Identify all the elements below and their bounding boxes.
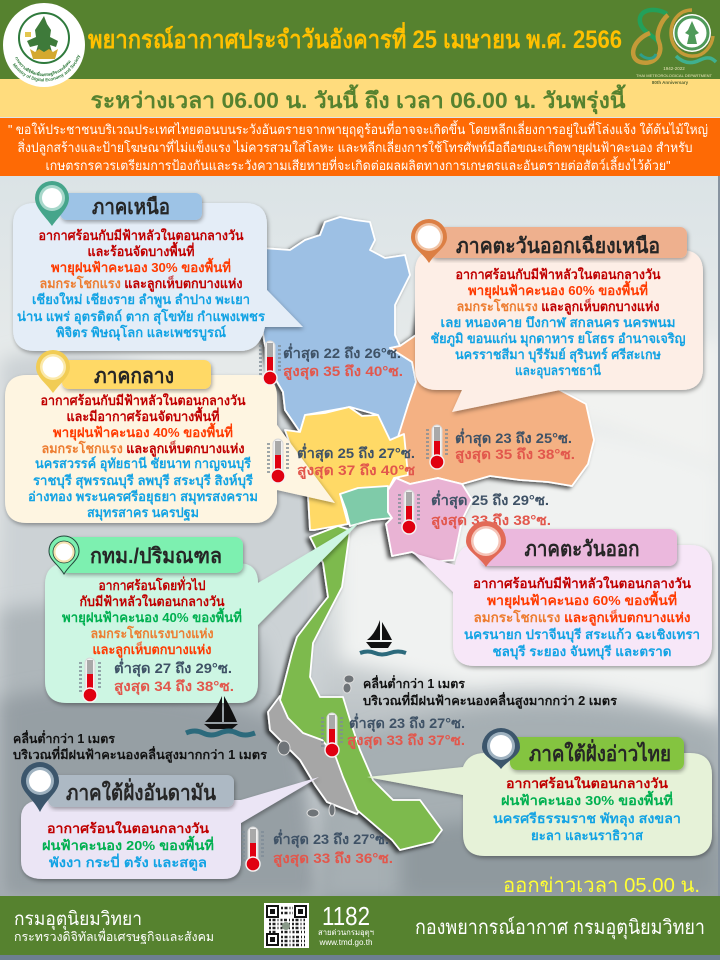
panel: central — [5, 350, 335, 523]
text east: ลมกระโชกแรง และลูกเห็บตกบางแห่ง — [474, 608, 690, 626]
text Bangkok: อากาศร้อนโดยทั่วไป — [98, 576, 206, 593]
wave note east — [363, 675, 617, 709]
icon: location pin central — [36, 350, 70, 393]
text northeast — [430, 266, 686, 379]
text north: อากาศร้อนกับมีฟ้าหลัวในตอนกลางวัน — [38, 227, 244, 243]
icon: location pin south gulf — [482, 728, 520, 769]
text east: อากาศร้อนกับมีฟ้าหลัวในตอนกลางวัน — [473, 575, 691, 591]
region: central — [285, 407, 408, 530]
temperature central: สูงสุด 37 ถึง 40°ซ — [297, 462, 416, 479]
heading Andaman — [48, 775, 234, 807]
icon: thermometer northeast — [426, 425, 448, 469]
icon: location pin east — [466, 521, 506, 567]
hotline: สายด่วนกรมอุตุฯ — [318, 928, 374, 937]
logo: ministry seal: Ministry of Digital Economy and Society — [12, 54, 80, 82]
anniversary caption: 80th Anniversary — [652, 80, 689, 85]
text east: ชลบุรี ระยอง จันทบุรี และตราด — [492, 644, 672, 660]
footer department name — [14, 909, 214, 944]
callout body south gulf — [367, 753, 712, 856]
heading east: ภาคตะวันออก — [524, 538, 640, 561]
text northeast: ลมกระโชกแรง และลูกเห็บตกบางแห่ง — [456, 297, 660, 315]
panel: south gulf coast — [367, 728, 712, 856]
callout body east — [413, 545, 712, 666]
temperature north: สูงสุด 35 ถึง 40°ซ. — [283, 363, 403, 380]
wave note west: บริเวณที่มีฝนฟ้าคะนองคลื่นสูงมากกว่า 1 เมตร — [13, 746, 267, 763]
text Andaman: อากาศร้อนในตอนกลางวัน — [47, 820, 209, 836]
icon: thermometer Andaman — [242, 827, 264, 871]
heading south gulf — [510, 737, 684, 770]
temperature north: ต่ำสุด 22 ถึง 26°ซ. — [283, 343, 401, 362]
temperature south — [347, 713, 465, 749]
map of Thailand — [258, 217, 594, 850]
text Bangkok: กับมีฟ้าหลัวในตอนกลางวัน — [80, 593, 225, 609]
region: north — [258, 217, 416, 441]
icon: location pin Andaman — [21, 762, 59, 812]
text northeast: อากาศร้อนกับมีฟ้าหลัวในตอนกลางวัน — [456, 266, 661, 282]
heading Andaman: ภาคใต้ฝั่งอันดามัน — [66, 777, 217, 805]
temperature central — [297, 443, 416, 479]
text Bangkok: และลูกเห็บตกบางแห่ง — [92, 640, 212, 658]
text north: น่าน แพร่ อุตรดิตถ์ ตาก สุโขทัย กำแพงเพชร — [17, 308, 265, 325]
text central: อ่างทอง พระนครศรีอยุธยา สมุทรสงคราม — [28, 489, 258, 505]
icon: thermometer south — [321, 713, 343, 757]
wave note east: คลื่นต่ำกว่า 1 เมตร — [363, 675, 465, 691]
warning band: เกษตรกรควรเตรียมการป้องกันและระวังความเสียหายที่จะเกิดต่อผลผลิตทางการเกษตรและอันตรายต่อสัตว์เลี้ยงไว้ด้วย" — [46, 156, 671, 173]
text east: นครนายก ปราจีนบุรี สระแก้ว ฉะเชิงเทรา — [464, 627, 700, 643]
text Andaman: ฝนฟ้าคะนอง 20% ของพื้นที่ — [42, 835, 214, 853]
logo: 80th anniversary: THAI METEOROLOGICAL DEPARTMENT — [636, 73, 713, 78]
temperature south: สูงสุด 33 ถึง 37°ซ. — [347, 732, 465, 749]
text south gulf: ฝนฟ้าคะนอง 30% ของพื้นที่ — [501, 790, 673, 808]
text central: พายุฝนฟ้าคะนอง 40% ของพื้นที่ — [53, 422, 233, 441]
text northeast: นครราชสีมา บุรีรัมย์ สุรินทร์ ศรีสะเกษ — [455, 347, 661, 363]
panel: northeast — [411, 219, 703, 412]
text central: ราชบุรี สุพรรณบุรี ลพบุรี สระบุรี สิงห์บุรี — [33, 473, 253, 489]
text Andaman: พังงา กระบี่ ตรัง และสตูล — [49, 853, 207, 871]
text central: สมุทรสาคร นครปฐม — [87, 505, 199, 522]
panel: south Andaman coast — [21, 762, 319, 879]
header band — [0, 0, 720, 79]
heading north — [60, 193, 202, 220]
text east: พายุฝนฟ้าคะนอง 60% ของพื้นที่ — [487, 590, 677, 609]
title: พยากรณ์อากาศประจำวันอังคารที่ 25 เมษายน พ.ศ. 2566 — [88, 22, 622, 54]
icon: thermometer Bangkok — [79, 658, 101, 702]
heading central: ภาคกลาง — [94, 365, 174, 388]
hotline: 1182 — [322, 901, 370, 931]
text south gulf: อากาศร้อนในตอนกลางวัน — [506, 775, 668, 791]
QR code — [264, 903, 309, 948]
callout body north — [13, 203, 303, 351]
panel: Bangkok and vicinity — [45, 522, 360, 703]
text central: และมีอากาศร้อนจัดบางพื้นที่ — [66, 406, 220, 424]
temperature east: ต่ำสุด 25 ถึง 29°ซ. — [431, 490, 549, 509]
temperature Bangkok: ต่ำสุด 27 ถึง 29°ซ. — [114, 658, 232, 677]
heading Bangkok: กทม./ปริมณฑล — [90, 545, 222, 568]
text north: ลมกระโชกแรง และลูกเห็บตกบางแห่ง — [40, 274, 242, 292]
heading east — [480, 529, 677, 566]
text northeast: และอุบลราชธานี — [515, 363, 601, 379]
icon: thermometer north — [259, 341, 281, 385]
icon: location pin northeast — [411, 219, 447, 263]
temperature Andaman: สูงสุด 33 ถึง 36°ซ. — [273, 850, 393, 867]
heading central — [62, 360, 211, 389]
logo: 80th anniversary — [633, 10, 716, 78]
small islands — [278, 675, 354, 817]
temperature Bangkok — [114, 658, 234, 695]
callout body northeast — [415, 250, 703, 412]
text northeast: พายุฝนฟ้าคะนอง 60% ของพื้นที่ — [468, 280, 648, 299]
text Bangkok: ลมกระโชกแรงบางแห่ง — [90, 625, 214, 641]
issue time: ออกข่าวเวลา 05.00 น. — [503, 875, 700, 897]
text central — [28, 392, 258, 522]
icon: thermometer east — [398, 490, 420, 534]
text north — [17, 227, 265, 341]
temperature northeast: สูงสุด 35 ถึง 38°ซ. — [455, 446, 575, 463]
hotline — [318, 901, 374, 947]
temperature central: ต่ำสุด 25 ถึง 27°ซ. — [297, 443, 415, 462]
text east — [464, 575, 700, 660]
text central: ลมกระโชกแรง และลูกเห็บตกบางแห่ง — [42, 439, 244, 457]
warning band: สิ่งปลูกสร้างและป้ายโฆษณาที่ไม่แข็งแรง ไม่ควรสวมใส่โลหะ และหลีกเลี่ยงการใช้โทรศัพท์มือถือขณะเกิดพายุฝนฟ้าคะนอง สำหรับ — [17, 138, 693, 156]
icon: ship west — [186, 696, 255, 735]
wave note west — [13, 730, 267, 763]
logo: 80th anniversary: 1942-2022 — [663, 66, 685, 71]
temperature northeast — [455, 428, 575, 463]
icon: location pin north — [35, 181, 69, 226]
text Bangkok: พายุฝนฟ้าคะนอง 40% ของพื้นที่ — [62, 607, 242, 626]
text north: พายุฝนฟ้าคะนอง 30% ของพื้นที่ — [51, 257, 231, 276]
subtitle band: ระหว่างเวลา 06.00 น. วันนี้ ถึง เวลา 06.00 น. วันพรุ่งนี้ — [90, 84, 627, 115]
temperature Bangkok: สูงสุด 34 ถึง 38°ซ. — [114, 678, 234, 695]
logo: ministry seal: กระทรวงดิจิทัลเพื่อเศรษฐกิจและสังคม — [15, 57, 71, 76]
subtitle band — [0, 79, 720, 117]
text northeast: ชัยภูมิ ขอนแก่น มุกดาหาร ยโสธร อำนาจเจริญ — [430, 330, 686, 347]
heading Bangkok — [60, 537, 243, 573]
text north: และร้อนจัดบางพื้นที่ — [88, 241, 194, 259]
text south gulf: ยะลา และนราธิวาส — [531, 828, 643, 843]
text central: นครสวรรค์ อุทัยธานี ชัยนาท กาญจนบุรี — [35, 456, 251, 472]
panel: east — [413, 521, 712, 666]
region: Bangkok — [340, 486, 392, 526]
text north: พิจิตร พิษณุโลก และเพชรบูรณ์ — [56, 324, 226, 341]
heading north: ภาคเหนือ — [92, 195, 170, 219]
callout body central — [5, 375, 335, 523]
region: south west coast — [268, 696, 372, 814]
icon: thermometer central — [267, 439, 289, 483]
text northeast: เลย หนองคาย บึงกาฬ สกลนคร นครพนม — [440, 315, 676, 330]
callout body Bangkok — [45, 522, 360, 703]
heading south gulf: ภาคใต้ฝั่งอ่าวไทย — [529, 738, 671, 766]
heading northeast: ภาคตะวันออกเฉียงเหนือ — [456, 234, 660, 258]
region: south — [280, 526, 442, 850]
text north: เชียงใหม่ เชียงราย ลำพูน ลำปาง พะเยา — [32, 291, 250, 308]
region: east — [386, 478, 472, 562]
icon: location pin Bangkok — [49, 536, 79, 574]
wave note west: คลื่นต่ำกว่า 1 เมตร — [13, 730, 115, 746]
text Andaman — [42, 820, 214, 871]
footer department name: กระทรวงดิจิทัลเพื่อเศรษฐกิจและสังคม — [14, 928, 214, 944]
temperature north — [283, 343, 403, 380]
hotline: www.tmd.go.th — [318, 938, 372, 947]
temperature Andaman: ต่ำสุด 23 ถึง 27°ซ. — [273, 829, 389, 848]
text south gulf — [493, 775, 681, 843]
text central: อากาศร้อนกับมีฟ้าหลัวในตอนกลางวัน — [40, 392, 246, 408]
temperature south: ต่ำสุด 23 ถึง 27°ซ. — [349, 713, 465, 732]
footer department name: กรมอุตุนิยมวิทยา — [14, 909, 142, 931]
warning band — [0, 118, 720, 176]
panel: north — [13, 181, 303, 351]
heading northeast — [430, 227, 687, 258]
text Bangkok — [62, 576, 242, 658]
temperature Andaman — [273, 829, 393, 867]
wave note east: บริเวณที่มีฝนฟ้าคะนองคลื่นสูงมากกว่า 2 เมตร — [363, 692, 617, 709]
logo: ministry seal — [3, 3, 85, 87]
callout body Andaman — [21, 777, 319, 879]
temperature northeast: ต่ำสุด 23 ถึง 25°ซ. — [455, 428, 572, 447]
temperature east: สูงสุด 33 ถึง 38°ซ. — [431, 512, 551, 529]
footer — [0, 896, 720, 960]
region: northeast — [390, 250, 594, 486]
text south gulf: นครศรีธรรมราช พัทลุง สงขลา — [493, 811, 681, 827]
background sky and mountains — [0, 176, 720, 900]
icon: ship east — [360, 620, 406, 654]
temperature east — [431, 490, 551, 529]
